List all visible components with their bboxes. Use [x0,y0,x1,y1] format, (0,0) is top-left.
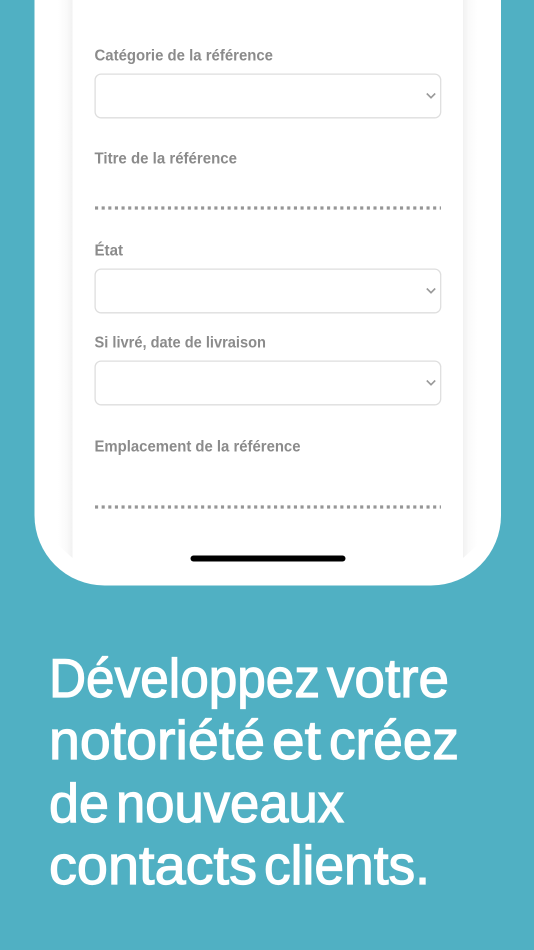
home indicator [190,556,346,562]
screen edge shadow right [463,0,478,558]
heading: clients. [264,834,430,896]
heading: notoriété [49,709,265,771]
heading: votre [327,647,449,709]
dotted input: title [95,206,441,210]
label: title: Titre de la référence [94,150,237,168]
heading: de [49,772,109,834]
heading: et [272,709,321,771]
heading: Développez [49,647,320,709]
heading: nouveaux [116,772,344,834]
heading: contacts [49,834,257,896]
select: state [95,269,441,313]
heading [49,647,459,896]
label: category: Catégorie de la référence [94,48,273,64]
dotted input: location [95,505,441,509]
phone frame [34,0,501,586]
select: delivery date [95,361,441,405]
form [94,48,441,507]
select: category [95,74,441,118]
label: location: Emplacement de la référence [94,438,301,456]
phone mockup [34,0,501,586]
label: state: État [94,242,123,260]
heading: créez [329,709,459,771]
screen edge shadow left [58,0,72,558]
label: delivery date: Si livré, date de livraison [94,334,266,352]
